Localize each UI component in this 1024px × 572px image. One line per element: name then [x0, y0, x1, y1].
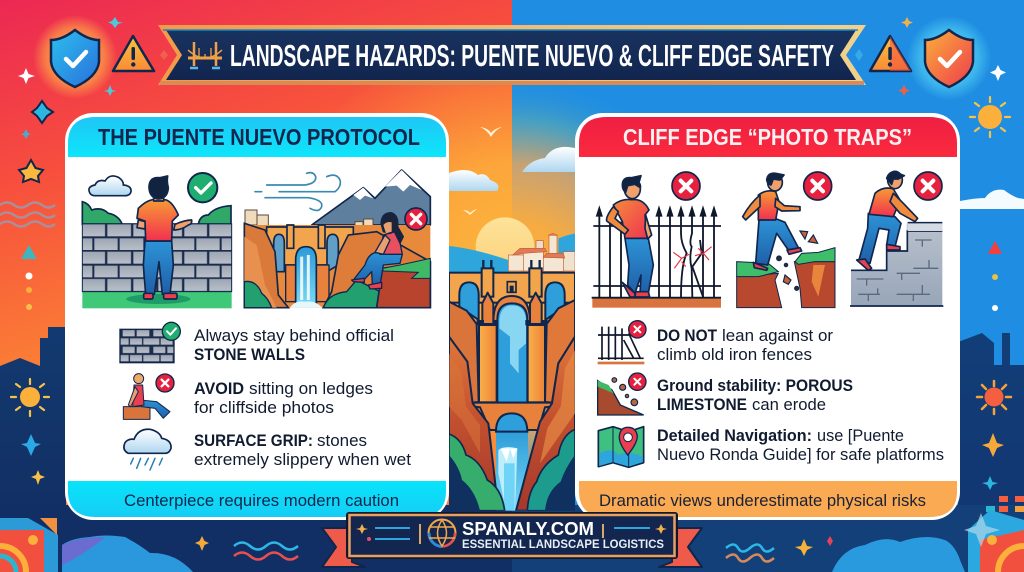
icon: left warning triangle — [113, 36, 154, 71]
sun — [11, 379, 49, 416]
right greenery — [527, 429, 575, 511]
tagline: ESSENTIAL LANDSCAPE LOGISTICS — [462, 539, 664, 551]
dots — [992, 274, 998, 280]
list item: avoid ledges — [123, 374, 373, 419]
central illustration: Puente Nuevo bridge and gorge — [449, 217, 575, 512]
fence — [592, 208, 721, 298]
side arches — [459, 282, 479, 320]
icon: stone wall with check — [120, 322, 180, 363]
list item: iron fences — [598, 321, 833, 364]
gold sparkle — [795, 539, 813, 556]
illustration: person stepping over crumbling ground — [737, 172, 835, 308]
list item: surface grip — [124, 429, 411, 470]
left cliff — [449, 302, 479, 403]
upper deck of bridge — [449, 273, 575, 303]
list item: avoid ledges: sitting on ledges — [249, 379, 373, 398]
panel: cliff edge photo traps — [575, 113, 960, 520]
pier caps — [477, 320, 548, 325]
pale sparkle — [964, 513, 1000, 547]
stepped wall — [851, 223, 942, 306]
list item: detailed navigation: use [Puente — [817, 426, 904, 445]
list item: surface grip: SURFACE GRIP: — [194, 431, 313, 450]
illustration: person behind stone wall with check — [82, 173, 232, 308]
list item: avoid ledges: AVOID — [194, 379, 244, 398]
list item: detailed navigation: Nuevo Ronda Guide] for safe platforms — [657, 445, 944, 464]
cross badge — [672, 172, 700, 200]
list item: surface grip: stones — [317, 431, 367, 450]
cloud — [960, 190, 1024, 209]
sparkle small — [104, 85, 116, 96]
lower arch — [473, 403, 552, 430]
left greenery — [449, 434, 505, 511]
illustration: person leaning on cracked iron fence — [592, 172, 721, 308]
list item: porous limestone — [598, 373, 853, 415]
bridge arches — [274, 234, 284, 272]
list item: surface grip: extremely slippery when wet — [194, 450, 411, 469]
ledge — [377, 262, 430, 308]
right ribbon — [659, 528, 702, 567]
list item: detailed navigation: Detailed Navigation: — [657, 426, 812, 445]
rocks — [777, 231, 818, 290]
shadow — [126, 294, 190, 304]
wave pair — [726, 544, 774, 562]
glow behind right shield — [907, 16, 991, 100]
main opening — [497, 303, 527, 403]
waterfall — [296, 247, 316, 305]
sparkle navy blue — [32, 101, 53, 123]
bridge deck — [267, 227, 353, 265]
town left — [245, 210, 373, 231]
cloud — [89, 176, 131, 196]
white sparkle — [990, 65, 1006, 81]
woman — [352, 213, 403, 289]
gold sparkle — [982, 433, 1004, 457]
mountains — [312, 170, 430, 225]
arch ring — [493, 296, 530, 322]
dots — [26, 272, 32, 280]
waterfall — [498, 447, 517, 511]
cross badge — [405, 208, 427, 230]
footer brand banner — [322, 513, 702, 567]
gold sparkle — [901, 17, 913, 28]
icon: right warning triangle — [870, 36, 911, 71]
sparkle — [108, 17, 123, 28]
purple cloud tint — [62, 537, 105, 565]
coloured corner square — [980, 530, 1024, 572]
brand name: SPANALY.COM — [462, 519, 594, 539]
panel header — [579, 117, 957, 157]
icon: eroding slope — [598, 373, 646, 415]
list item: stone walls: Always stay behind official — [194, 326, 394, 345]
panel footer — [579, 481, 957, 517]
panel header: CLIFF EDGE “PHOTO TRAPS” — [623, 124, 912, 150]
list item: stone walls: STONE WALLS — [194, 345, 305, 364]
bushes — [82, 202, 122, 224]
red sparkle — [898, 85, 910, 96]
sun — [970, 97, 1010, 137]
icon: rain cloud — [124, 429, 171, 470]
icon: fence with cross — [598, 321, 646, 364]
small blocks — [986, 496, 1024, 512]
right cliff — [323, 232, 430, 308]
cross badge — [914, 172, 942, 200]
icon: map with pin — [598, 427, 644, 467]
triangle — [21, 245, 37, 259]
list item: stone walls — [120, 322, 394, 364]
icon: orange shield — [925, 30, 973, 87]
star — [19, 160, 43, 182]
pink diamond — [827, 536, 833, 546]
gold sparkle — [31, 470, 45, 485]
check badge — [188, 173, 217, 202]
hills — [449, 246, 508, 273]
person from behind — [137, 176, 192, 299]
orange sun lower — [977, 381, 1011, 414]
decorative lines — [375, 524, 650, 544]
panel footer — [68, 481, 446, 517]
sun — [476, 217, 534, 276]
icon: blue shield — [51, 30, 99, 87]
pink dot — [367, 537, 371, 541]
illustration: woman on ledge near gorge with cross — [244, 170, 430, 308]
blue sparkle lower — [21, 434, 41, 456]
person — [607, 176, 653, 297]
red triangle — [988, 241, 1002, 254]
list item: iron fences: lean against or — [722, 326, 833, 345]
plate — [347, 513, 677, 558]
bottom left cloud — [62, 536, 193, 572]
left cliff — [244, 223, 288, 308]
right side decorations — [726, 16, 1024, 572]
panel footer: Dramatic views underestimate physical risks — [599, 491, 926, 510]
cross badge — [804, 172, 832, 200]
town — [508, 233, 575, 271]
stone wall — [82, 224, 232, 292]
bridge pillars — [287, 225, 325, 248]
bottom left block — [0, 518, 58, 572]
list item: avoid ledges: for cliffside photos — [194, 398, 334, 417]
list item: porous limestone: can erode — [752, 395, 826, 414]
icon: person sitting on ledge — [123, 374, 174, 419]
list item: detailed navigation — [598, 426, 944, 467]
cracks — [673, 247, 712, 268]
person — [743, 173, 802, 270]
pillars — [479, 325, 497, 402]
wave pair — [234, 542, 298, 560]
fence base — [592, 298, 721, 308]
waves — [0, 202, 55, 226]
sparkle grey — [21, 129, 31, 139]
panel: the Puente Nuevo protocol — [65, 113, 449, 520]
wind lines — [255, 173, 340, 210]
person — [857, 171, 918, 270]
sparkle white — [18, 68, 35, 84]
left ribbon — [322, 528, 365, 567]
right ground — [794, 262, 835, 308]
coloured corner square — [0, 530, 44, 572]
panel footer: Centerpiece requires modern caution — [124, 491, 399, 510]
left ground — [737, 273, 782, 308]
panel header: THE PUENTE NUEVO PROTOCOL — [98, 124, 420, 150]
orange backdrop — [244, 225, 430, 308]
right cliff — [545, 300, 575, 403]
grass — [82, 291, 232, 308]
gate detail — [507, 282, 516, 292]
bottom right block — [968, 510, 1024, 572]
icon: globe — [428, 520, 456, 546]
bottom right cloud — [832, 537, 965, 572]
clouds and birds in sunset sky — [449, 127, 575, 215]
list item: porous limestone: Ground stability: POROUS — [657, 376, 853, 395]
list item: porous limestone: LIMESTONE — [657, 395, 747, 414]
glow behind left shield — [33, 15, 117, 99]
panel header — [68, 117, 446, 157]
list item: iron fences: DO NOT — [657, 326, 718, 345]
title banner — [158, 25, 866, 85]
left side decorations — [0, 15, 298, 572]
gold sparkle bottom — [195, 536, 209, 551]
cyan sparkle — [982, 476, 998, 490]
towers — [483, 260, 540, 268]
illustration: person climbing stepped stone wall — [850, 171, 943, 306]
list item: iron fences: climb old iron fences — [657, 345, 812, 364]
icon: bridge — [188, 42, 222, 68]
tower spires — [482, 293, 542, 324]
small orange triangle — [40, 518, 57, 535]
left small sparkle — [356, 524, 368, 534]
right small sparkle — [655, 524, 667, 534]
